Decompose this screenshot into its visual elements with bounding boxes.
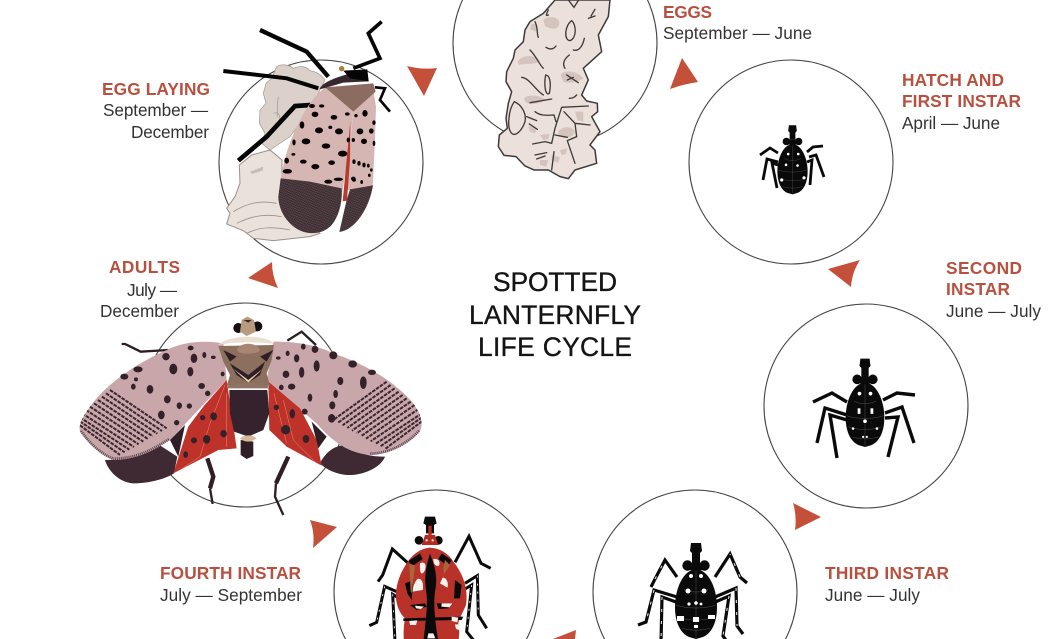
arrow: second to third instar: [793, 503, 821, 530]
label: adults: December: [100, 301, 179, 321]
eggs circle: [453, 0, 657, 145]
stage: egg laying: [102, 22, 423, 264]
label: third instar: [825, 563, 950, 605]
icon: adult with spread wings: [80, 317, 422, 515]
left and right fore legs: [122, 332, 316, 352]
hind legs: [207, 457, 288, 488]
label: hatch and first instar: April — June: [902, 113, 1000, 133]
label: adults: ADULTS: [109, 257, 180, 277]
third instar circle: [593, 490, 797, 639]
title: [469, 267, 641, 362]
label: adults: July —: [127, 280, 178, 300]
second instar circle: [764, 304, 968, 508]
label: hatch and first instar: HATCH AND: [902, 70, 1004, 90]
first instar circle: [689, 60, 893, 264]
icon: fourth instar nymph: [369, 517, 491, 639]
label: hatch and first instar: [902, 70, 1022, 133]
label: egg laying: September —: [103, 100, 209, 120]
label: adults: [100, 257, 180, 321]
icon: third instar nymph: [638, 543, 747, 639]
label: fourth instar: July — September: [160, 585, 302, 605]
wing spots: [120, 344, 376, 425]
arrow: fourth instar to adults: [310, 520, 337, 548]
icon: first instar nymph: [760, 125, 824, 194]
label: second instar: [946, 258, 1041, 321]
right hindwing: [320, 445, 385, 475]
label: egg laying: [102, 79, 210, 142]
label: egg laying: EGG LAYING: [102, 79, 210, 99]
wing tip hatching: [80, 390, 170, 460]
arrow: third to fourth instar: [553, 630, 576, 639]
thorax: [227, 382, 268, 388]
label: eggs: EGGS: [663, 2, 712, 22]
icon: second instar nymph: [813, 359, 915, 458]
title: LIFE CYCLE: [478, 332, 632, 362]
egg laying circle: [219, 60, 423, 264]
title: LANTERNFLY: [469, 300, 641, 330]
stage: hatch and first instar: [689, 60, 1022, 264]
adults circle: [143, 303, 347, 507]
stage: adults: [80, 257, 422, 515]
label: eggs: September — June: [663, 23, 812, 43]
stage: fourth instar: [160, 490, 538, 639]
arrow: hatch to second instar: [828, 260, 860, 287]
stage: eggs: [453, 0, 812, 179]
label: eggs: [663, 2, 812, 43]
left red hindwing: [173, 380, 237, 473]
label: second instar: INSTAR: [946, 279, 1011, 299]
label: third instar: June — July: [825, 585, 920, 605]
icon: adult laying eggs: [223, 22, 390, 241]
label: second instar: June — July: [946, 301, 1041, 321]
arrow: adults to egg laying: [248, 262, 278, 288]
stage: third instar: [593, 490, 950, 639]
label: second instar: SECOND: [946, 258, 1022, 278]
arrow: egg laying to eggs: [407, 66, 437, 96]
label: third instar: THIRD INSTAR: [825, 563, 950, 583]
left hindwing: [105, 445, 177, 483]
stage: second instar: [764, 258, 1041, 508]
label: fourth instar: FOURTH INSTAR: [160, 563, 302, 583]
arrow: eggs to hatch: [670, 58, 698, 89]
right red hindwing: [268, 382, 322, 466]
icon: egg mass: [498, 0, 610, 179]
fourth instar circle: [334, 490, 538, 639]
collar and head: [218, 337, 274, 345]
label: fourth instar: [160, 563, 302, 605]
body and dark underwings: [170, 422, 327, 457]
label: egg laying: December: [131, 122, 209, 142]
title: SPOTTED: [493, 267, 617, 297]
label: hatch and first instar: FIRST INSTAR: [902, 91, 1022, 111]
